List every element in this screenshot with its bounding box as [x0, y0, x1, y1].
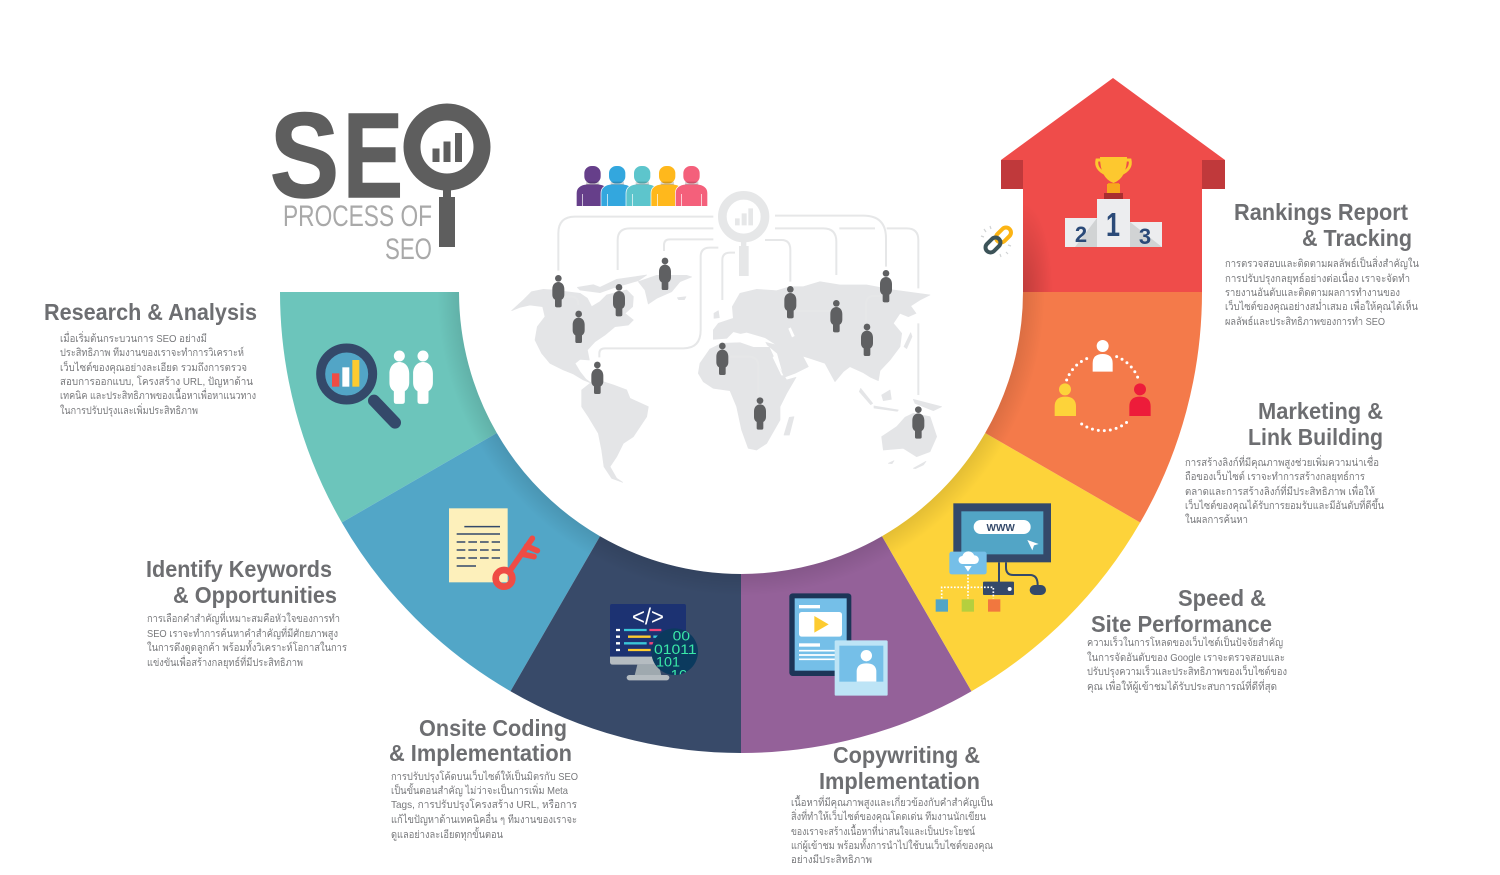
text block: Rankings Report & Tracking: รายงานอันดับและติดตามผลการทำงานของ [1225, 287, 1400, 299]
text block: Copywriting: เนื้อหาที่มีคุณภาพสูงและเกี่ยวข้องกับคำสำคัญเป็น [791, 795, 993, 809]
icon: people network circle [1055, 340, 1151, 431]
text block: Onsite Coding: เป็นขั้นตอนสำคัญ ไม่ว่าจะเป็นการเพิ่ม Meta [391, 783, 568, 797]
panel: curved arrow segments [280, 78, 1225, 753]
text block: Marketing & Link Building: Marketing & [1258, 398, 1383, 424]
text block: Identify Keywords [146, 556, 347, 669]
segment: copywriting purple [741, 536, 972, 753]
text block: Copywriting: Implementation [819, 768, 980, 794]
binary digits: 00 [673, 628, 690, 644]
text block: Marketing & Link Building: การสร้างลิงก์ที่มีคุณภาพสูงช่วยเพิ่มความน่าเชื่อ [1185, 455, 1379, 469]
logo letters: S [270, 87, 339, 223]
text block: Speed & Site Performance: ปรับปรุงความเร็วและประสิทธิภาพของเว็บไซต์ของ [1087, 664, 1287, 678]
map person pins [552, 258, 924, 439]
logo letters [270, 87, 403, 223]
text block: Onsite Coding: แก้ไขปัญหาด้านเทคนิคอื่น ๆ ทีมงานของเราจะ [391, 812, 577, 826]
text block: Speed & Site Performance [1087, 585, 1287, 693]
logo magnifier [412, 112, 482, 247]
world map illustration [512, 166, 942, 482]
text block: Onsite Coding: Onsite Coding [419, 715, 567, 741]
text block: Research & Analysis: สอบการออกแบบ, โครงสร้าง URL, ปัญหาด้าน [60, 375, 253, 388]
text block: Marketing & Link Building: ตลาดและการสร้างลิงก์ที่มีประสิทธิภาพ เพื่อให้ [1185, 484, 1375, 498]
text block: Marketing & Link Building: Link Building [1248, 424, 1383, 450]
logo subtitle: SEO [385, 233, 432, 266]
icon: code monitor with binary [610, 604, 698, 682]
text block: Identify Keywords: แข่งขันเพื่อสร้างกลยุทธ์ที่มีประสิทธิภาพ [147, 655, 303, 669]
binary digits [654, 631, 696, 675]
text block: Onsite Coding [389, 715, 578, 841]
icon: trophy and podium: 1 [1106, 206, 1120, 243]
segment: coding navy [510, 536, 741, 753]
icon: document and key [449, 508, 537, 587]
coloured crowd icon [576, 166, 708, 206]
text block: Rankings Report & Tracking: เว็บไซต์ของคุณอย่างสม่ำเสมอ เพื่อให้คุณได้เห็น [1225, 299, 1418, 313]
text block: Onsite Coding: ดูแลอย่างละเอียดทุกขั้นตอน [391, 827, 503, 841]
text block: Copywriting: ของเราจะสร้างเนื้อหาที่น่าสนใจและเป็นประโยชน์ [791, 824, 975, 838]
text block: Speed & Site Performance: ความเร็วในการโหลดของเว็บไซต์เป็นปัจจัยสำคัญ [1087, 635, 1283, 649]
segment: speed yellow [882, 433, 1140, 691]
text block: Research & Analysis: เว็บไซต์ของคุณอย่างละเอียด รวมถึงการตรวจ [60, 360, 247, 374]
icon: website monitor and network [936, 503, 1051, 612]
text block: Speed & Site Performance: Site Performance [1091, 611, 1272, 637]
text block: Copywriting [791, 742, 993, 866]
text block: Rankings Report & Tracking [1225, 199, 1419, 328]
text block: Copywriting: แก่ผู้เข้าชม พร้อมทั้งการนำไปใช้บนเว็บไซต์ของคุณ [791, 838, 993, 852]
text block: Rankings Report & Tracking: การปรับปรุงกลยุทธ์อย่างต่อเนื่อง เราจะจัดทำ [1225, 271, 1410, 285]
text block: Speed & Site Performance: คุณ เพื่อให้ผู้เข้าชมได้รับประสบการณ์ที่ดีที่สุด [1087, 679, 1277, 693]
logo letters: E [343, 87, 403, 223]
icon: tablet and photo [789, 593, 888, 696]
text block: Copywriting: Copywriting & [833, 742, 980, 768]
binary digits: 10 [671, 666, 688, 682]
text block: Copywriting: สิ่งที่ทำให้เว็บไซต์ของคุณโดดเด่น ทีมงานนักเขียน [791, 809, 986, 823]
icon: code monitor with binary: </> [632, 604, 664, 630]
text block: Identify Keywords: SEO เราจะทำการค้นหาคำสำคัญที่มีศักยภาพสูง [147, 626, 338, 640]
text block: Research & Analysis: ในการปรับปรุงและเพิ่มประสิทธิภาพ [60, 403, 198, 417]
text block: Research & Analysis: Research & Analysis [44, 299, 257, 325]
text block: Marketing & Link Building: เว็บไซต์ของคุณได้รับการยอมรับและมีอันดับที่ดีขึ้น [1185, 498, 1384, 512]
segment: keywords blue [342, 433, 600, 691]
text block: Identify Keywords: ในการดึงดูดลูกค้า พร้อมทั้งวิเคราะห์โอกาสในการ [147, 640, 347, 654]
text block: Identify Keywords: & Opportunities [173, 582, 337, 608]
segment: marketing orange [985, 292, 1202, 522]
text block: Rankings Report & Tracking: การตรวจสอบและติดตามผลลัพธ์เป็นสิ่งสำคัญใน [1225, 256, 1419, 270]
text block: Rankings Report & Tracking: Rankings Report [1234, 199, 1408, 225]
text block: Marketing & Link Building [1185, 398, 1384, 526]
text block: Research & Analysis: ประสิทธิภาพ ทีมงานของเราจะทำการวิเคราะห์ [60, 346, 244, 359]
text block: Onsite Coding: & Implementation [389, 740, 572, 766]
text block: Research & Analysis: เทคนิค และประสิทธิภาพของเนื้อหาเพื่อหาแนวทาง [60, 388, 256, 402]
icon: trophy and podium: 3 [1139, 224, 1151, 249]
text block: Copywriting: อย่างมีประสิทธิภาพ [791, 853, 872, 866]
text block: Onsite Coding: การปรับปรุงโค้ดบนเว็บไซต์ให้เป็นมิตรกับ SEO [391, 769, 578, 783]
text block: Identify Keywords: Identify Keywords [146, 556, 332, 582]
binary digits: 101 [656, 654, 680, 670]
text block: Speed & Site Performance: ในการจัดอันดับของ Google เราจะตรวจสอบและ [1087, 651, 1285, 664]
logo subtitle: PROCESS OF [283, 200, 432, 233]
icon: trophy and podium: 2 [1075, 222, 1087, 247]
icon: trophy and podium [1065, 157, 1162, 249]
text block: Speed & Site Performance: Speed & [1178, 585, 1266, 611]
central magnifier icon [722, 195, 765, 276]
icon: research magnifier and people [321, 348, 433, 423]
logo: SEO with magnifier [270, 87, 482, 266]
text block: Research & Analysis: เมื่อเริ่มต้นกระบวนการ SEO อย่างมี [60, 331, 207, 345]
segment: research teal [280, 292, 497, 522]
text block: Rankings Report & Tracking: & Tracking [1302, 225, 1412, 251]
text block: Marketing & Link Building: ในผลการค้นหา [1185, 513, 1248, 526]
text block: Marketing & Link Building: ถือของเว็บไซต์ เราจะทำการสร้างกลยุทธ์การ [1185, 469, 1365, 483]
logo subtitle [283, 200, 432, 266]
icon: website monitor and network: WWW [987, 523, 1015, 534]
connector lines [558, 216, 918, 395]
text block: Onsite Coding: Tags, การปรับปรุงโครงสร้าง URL, หรือการ [391, 798, 577, 811]
icon: chain link [981, 225, 1013, 257]
binary digits: 01011 [654, 641, 697, 657]
arrow head: red [1001, 78, 1225, 292]
continents [512, 275, 942, 482]
text block: Rankings Report & Tracking: ผลลัพธ์และประสิทธิภาพของการทำ SEO [1225, 315, 1385, 328]
text block: Research & Analysis [44, 299, 257, 417]
text block: Identify Keywords: การเลือกคำสำคัญที่เหมาะสมคือหัวใจของการทำ [147, 611, 340, 625]
